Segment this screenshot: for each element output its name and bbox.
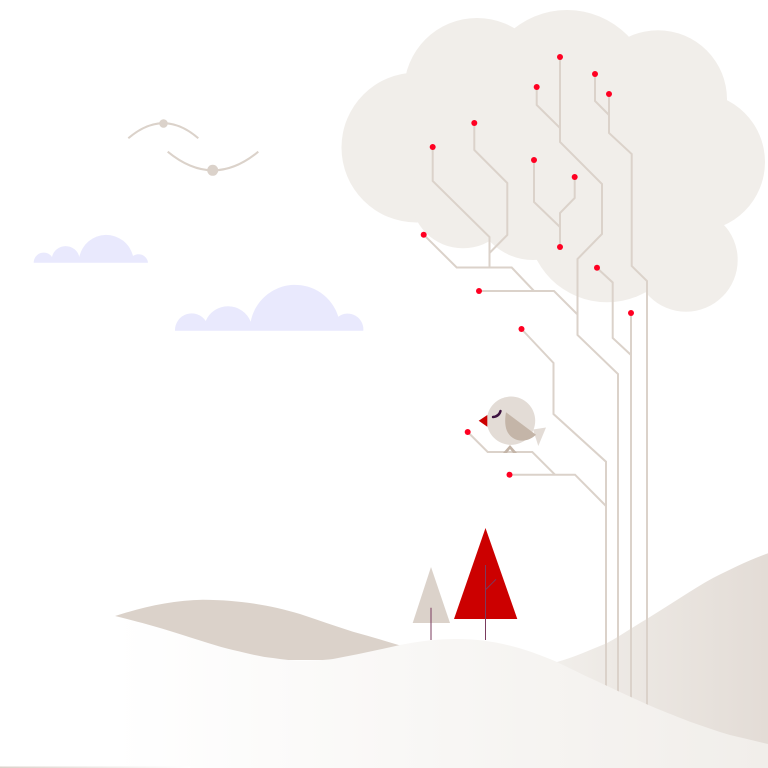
right background hill <box>557 553 768 768</box>
bird feet <box>503 445 517 453</box>
lower bird <box>168 152 258 176</box>
large cloud <box>175 285 363 331</box>
branch end dots <box>421 54 634 478</box>
small cloud <box>34 235 148 263</box>
front foreground hill <box>115 616 768 768</box>
distant birds <box>128 119 258 176</box>
bird tail <box>533 428 546 446</box>
tree crown <box>342 10 765 312</box>
small beige tree <box>413 567 450 640</box>
ground base line <box>0 766 190 768</box>
left background hill <box>115 600 402 660</box>
bird body <box>487 396 535 445</box>
upper bird <box>128 119 198 138</box>
tree branches <box>424 57 647 720</box>
bird eye <box>493 411 500 417</box>
bird wing <box>505 412 536 441</box>
bird beak <box>479 415 487 427</box>
bird <box>479 396 546 453</box>
red tree <box>454 528 517 640</box>
